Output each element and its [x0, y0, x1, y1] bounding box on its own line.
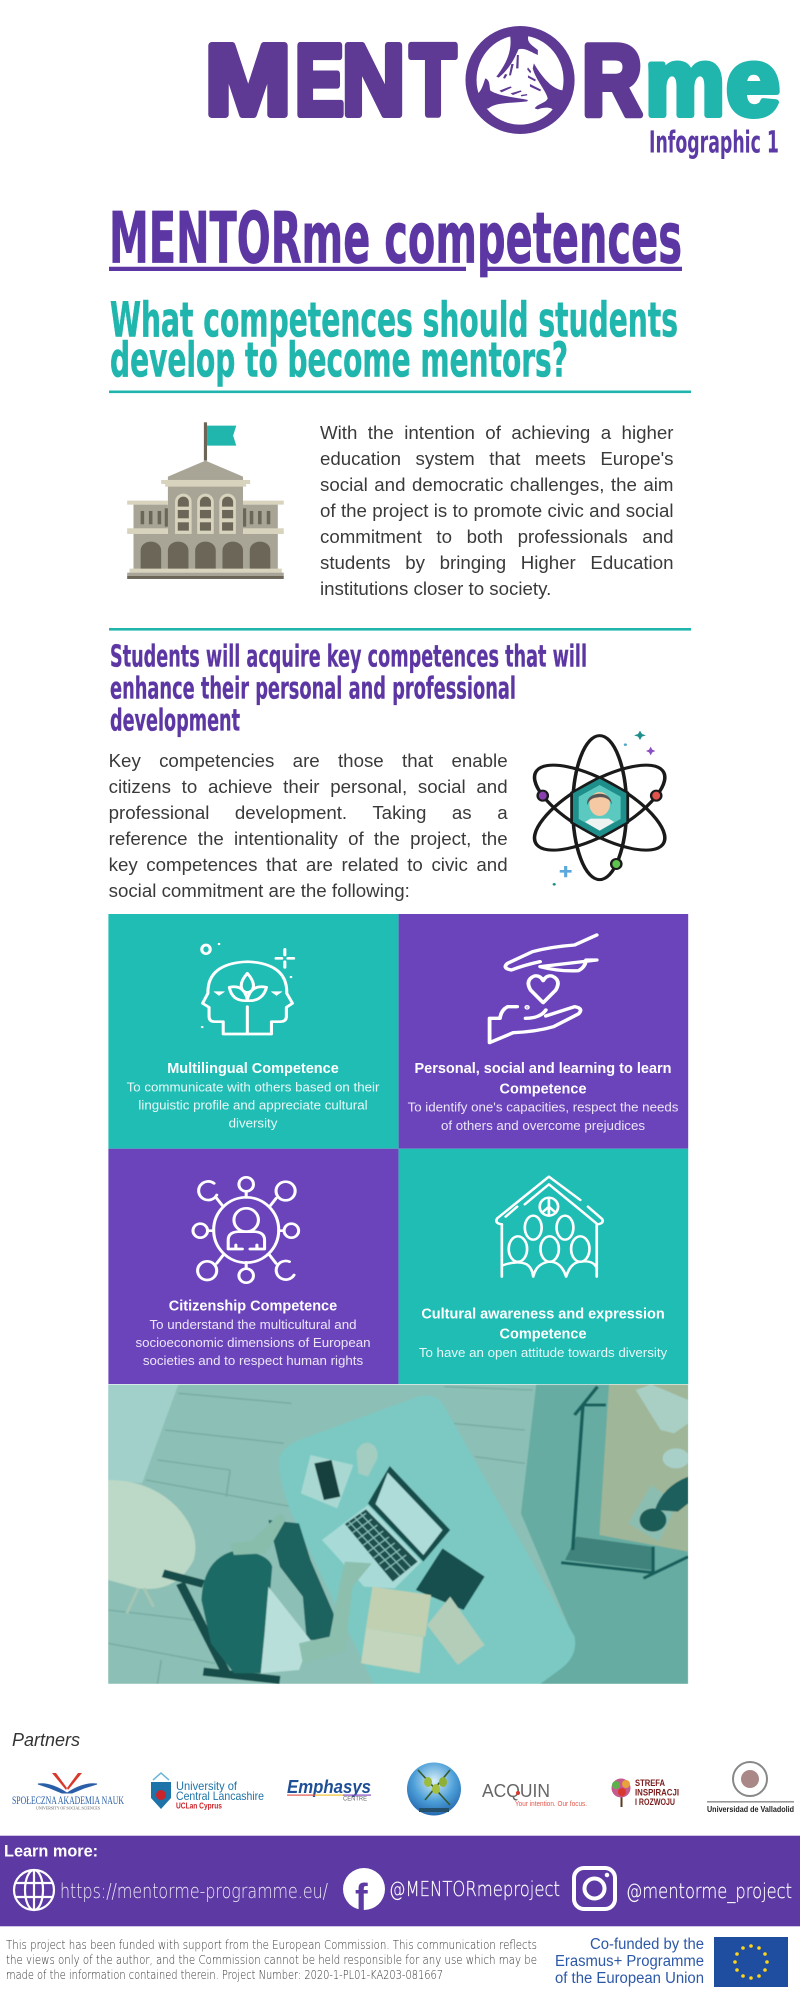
- heading: partners: Partners: [12, 1730, 80, 1750]
- panel: citizenship competence: [108, 1149, 399, 1384]
- text: co-funded by Erasmus+: Erasmus+ Programme: [555, 1953, 704, 1970]
- text: multilingual competence: diversity: [229, 1116, 278, 1131]
- section heading: key competences: enhance their personal and professional: [110, 671, 516, 706]
- text: cultural awareness: Cultural awareness and expression: [421, 1306, 665, 1322]
- logo word: MENT: T: [410, 25, 456, 137]
- icon: facebook: f: [355, 1877, 368, 1919]
- icon: EU flag: [714, 1937, 788, 1987]
- icon: atom with person: [520, 731, 680, 886]
- text: personal, social and learning: of others and overcome prejudices: [441, 1118, 645, 1133]
- logo: University of Central Lancashire: UCLan Cyprus: [176, 1800, 222, 1810]
- text: personal, social and learning: Personal, social and learning to learn: [414, 1061, 672, 1077]
- logo: Strefa Inspiracji i Rozwoju: [612, 1778, 679, 1808]
- text: citizenship competence: [135, 1299, 371, 1368]
- logo: Strefa Inspiracji i Rozwoju: I ROZWOJU: [635, 1797, 675, 1808]
- logo: University of Central Lancashire: University of: [176, 1779, 238, 1793]
- section heading: key competences: [110, 640, 587, 739]
- text: funding disclaimer: made of the information contained therein. Project Number: 2020-1-PL01-KA203-081667: [6, 1968, 443, 1982]
- text: co-funded by Erasmus+: of the European Union: [555, 1970, 704, 1987]
- icon: person network: [193, 1177, 299, 1283]
- logo word: MENT: N: [342, 25, 405, 137]
- logo: Społeczna Akademia Nauk: [12, 1773, 124, 1810]
- icon: two heads with lotus: [201, 943, 294, 1034]
- panel: personal, social and learning to learn competence: [399, 914, 688, 1149]
- icon: house with people and peace sign: [496, 1177, 603, 1277]
- text: cultural awareness: To have an open attitude towards diversity: [419, 1345, 668, 1360]
- text: multilingual competence: linguistic profile and appreciate cultural: [138, 1098, 368, 1113]
- panel: cultural awareness and expression competence: [399, 1149, 688, 1384]
- text: co-funded by Erasmus+: [555, 1936, 704, 1987]
- text: citizenship competence: To understand the multicultural and: [150, 1317, 356, 1332]
- logo: Emphasys Centre: Emphasys: [287, 1777, 371, 1797]
- link: facebook handle: @MENTORmeproject: [389, 1877, 560, 1901]
- logo: Społeczna Akademia Nauk: SPOŁECZNA AKADEMIA NAUK: [12, 1795, 124, 1807]
- logo: ACQUIN: [482, 1781, 587, 1808]
- logo: olive branch oval: [407, 1762, 461, 1816]
- panel: multilingual competence: [108, 914, 399, 1149]
- photo: student working at a laptop, teal tint: [108, 1384, 689, 1684]
- icon: hands holding heart: [490, 935, 597, 1043]
- text: multilingual competence: [127, 1061, 380, 1131]
- logo word: MENT: M: [205, 25, 291, 137]
- heading: learn more: Learn more:: [4, 1843, 98, 1861]
- logo: Społeczna Akademia Nauk: UNIVERSITY OF SOCIAL SCIENCES: [36, 1806, 100, 1810]
- subtitle question: [110, 293, 678, 389]
- logo: Strefa Inspiracji i Rozwoju: STREFA: [635, 1778, 665, 1789]
- logo: Emphasys Centre: CENTRE: [343, 1797, 367, 1803]
- logo: ACQUIN: ACQUIN: [482, 1781, 550, 1801]
- text: multilingual competence: To communicate with others based on their: [127, 1080, 380, 1095]
- logo word: me: m: [645, 29, 725, 136]
- text block: project aim: With the intention of achieving a higher education system that meets Europe's social and democratic challenges, the aim of the project is to promote civic and social commitment to both professionals and students by bringing Higher Education institutions closer to society.: [320, 422, 674, 599]
- link: website: https://mentorme-programme.eu/: [60, 1879, 328, 1903]
- icon: instagram: [574, 1868, 615, 1909]
- panel: competences grid: [108, 914, 688, 1384]
- icon: globe: [14, 1870, 54, 1910]
- text: co-funded by Erasmus+: Co-funded by the: [590, 1936, 704, 1953]
- section heading: key competences: development: [110, 704, 240, 739]
- logo emblem: ring with three hands: [471, 31, 569, 129]
- logo: University of Central Lancashire: Central Lancashire: [176, 1789, 264, 1803]
- text: funding disclaimer: [6, 1938, 537, 1982]
- text: funding disclaimer: the views only of the author, and the Commission cannot be held responsible for any use which may be: [6, 1953, 537, 1967]
- logo: Universidad de Valladolid: [707, 1762, 794, 1814]
- text: cultural awareness: Competence: [499, 1326, 587, 1342]
- panel: learn more band: [0, 1836, 800, 1926]
- text: cultural awareness: [419, 1306, 668, 1360]
- logo word: me: [645, 29, 780, 136]
- text: multilingual competence: Multilingual Competence: [167, 1061, 339, 1077]
- icon: university building with flag: [127, 422, 284, 579]
- logo: University of Central Lancashire: [151, 1773, 264, 1810]
- logo word: me: e: [726, 29, 780, 136]
- text: citizenship competence: Citizenship Competence: [169, 1299, 337, 1315]
- text: funding disclaimer: This project has been funded with support from the European Commission. This communication reflects: [6, 1938, 537, 1952]
- icon: facebook: [343, 1868, 385, 1919]
- logo: MENTORme: [205, 25, 780, 137]
- text block: key competencies definition: Key competencies are those that enable citizens to achieve their personal, social and professional development. Taking as a reference the intentionality of the project, the key competences that are related to civic and social commitment are the following:: [109, 750, 508, 901]
- text: citizenship competence: socioeconomic dimensions of European: [135, 1335, 371, 1350]
- text: personal, social and learning: Competence: [499, 1081, 587, 1097]
- logo word: MENT: E: [295, 25, 344, 137]
- logo word: MENT: [205, 25, 642, 137]
- logo word: MENT: R: [582, 25, 642, 137]
- logo: Strefa Inspiracji i Rozwoju: INSPIRACJI: [635, 1788, 679, 1798]
- text: personal, social and learning: To identify one's capacities, respect the needs: [408, 1100, 679, 1115]
- text: personal, social and learning: [408, 1061, 679, 1133]
- logo: ACQUIN: Your intention. Our focus.: [515, 1799, 587, 1808]
- text: citizenship competence: societies and to respect human rights: [143, 1353, 363, 1368]
